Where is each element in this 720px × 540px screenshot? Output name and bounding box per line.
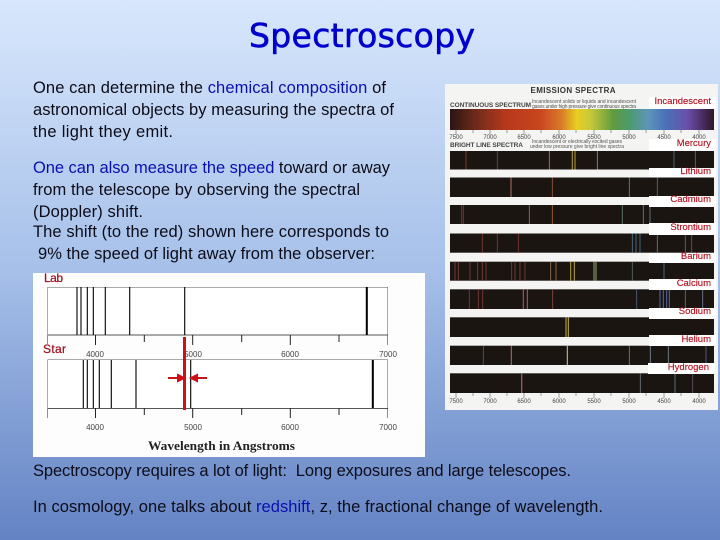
arrow: shift from right bbox=[191, 375, 207, 381]
element labels bbox=[648, 96, 716, 374]
text block: speed and doppler shift: 9% the speed of light away from the observer: bbox=[38, 245, 375, 263]
continuous spectrum heading: Incandescent solids or liquids and incandescent bbox=[532, 99, 637, 105]
star axis labels: 4000 bbox=[86, 423, 104, 432]
bottom wavelength scale: 5000 bbox=[622, 399, 636, 405]
element labels: Cadmium bbox=[670, 194, 711, 205]
star axis labels bbox=[86, 423, 397, 432]
spectrum: barium bbox=[450, 262, 714, 281]
image heading: EMISSION SPECTRA bbox=[530, 86, 616, 95]
spectrum: helium bbox=[450, 346, 714, 365]
bottom wavelength scale: 7000 bbox=[483, 399, 497, 405]
panel: lab and star spectra chart bbox=[33, 271, 425, 457]
spectrum: calcium bbox=[450, 289, 714, 309]
bottom wavelength scale: 5500 bbox=[587, 399, 601, 405]
top wavelength scale: 7000 bbox=[483, 135, 497, 141]
top wavelength scale: 7500 bbox=[449, 135, 463, 141]
spectrum: lithium bbox=[450, 178, 714, 197]
top wavelength scale: 5500 bbox=[587, 135, 601, 141]
text block: speed and doppler shift: One can also measure the speed toward or away bbox=[33, 159, 391, 177]
text block: chemical composition bbox=[33, 79, 394, 141]
element labels: Hydrogen bbox=[668, 362, 709, 373]
bottom wavelength scale: 6000 bbox=[552, 399, 566, 405]
lab axis labels: 7000 bbox=[379, 350, 397, 359]
element labels: Incandescent bbox=[654, 96, 711, 107]
bright line heading: Incandescent or electrically excited gases bbox=[532, 139, 622, 145]
bottom wavelength scale: 4000 bbox=[692, 399, 706, 405]
star axis labels: 6000 bbox=[281, 423, 299, 432]
panel: emission spectra image bbox=[445, 84, 718, 410]
spectrum: mercury bbox=[450, 151, 714, 170]
title: Spectroscopy bbox=[249, 16, 475, 55]
lab axis labels: 4000 bbox=[86, 350, 104, 359]
star axis labels: 5000 bbox=[184, 423, 202, 432]
text block: speed and doppler shift: The shift (to the red) shown here corresponds to bbox=[33, 223, 389, 241]
bright line heading bbox=[450, 139, 624, 150]
element labels: Barium bbox=[681, 251, 711, 262]
spectrum: sodium bbox=[450, 317, 714, 337]
text block: redshift: In cosmology, one talks about redshift, z, the fractional change of wavelength. bbox=[33, 498, 603, 516]
bottom wavelength scale: 4500 bbox=[657, 399, 671, 405]
red reference line bbox=[183, 337, 186, 410]
top wavelength scale: 6500 bbox=[517, 135, 531, 141]
element labels: Calcium bbox=[677, 278, 711, 289]
spectrum: strontium bbox=[450, 234, 714, 253]
element labels: Strontium bbox=[670, 222, 711, 233]
continuous spectrum band bbox=[450, 109, 714, 130]
star spectrum bbox=[48, 360, 388, 418]
continuous spectrum heading bbox=[450, 99, 637, 110]
text block: chemical composition: the light they emit. bbox=[33, 123, 173, 141]
top wavelength scale bbox=[449, 130, 706, 141]
bottom wavelength scale: 6500 bbox=[517, 399, 531, 405]
top wavelength scale: 6000 bbox=[552, 135, 566, 141]
top wavelength scale: 5000 bbox=[622, 135, 636, 141]
text block: speed and doppler shift: (Doppler) shift. bbox=[33, 203, 143, 221]
bright line heading: BRIGHT LINE SPECTRA bbox=[450, 142, 523, 149]
axis title: Wavelength in Angstroms bbox=[148, 438, 295, 453]
lab axis labels: 5000 bbox=[184, 350, 202, 359]
star axis labels: 7000 bbox=[379, 423, 397, 432]
lab axis labels: 6000 bbox=[281, 350, 299, 359]
top wavelength scale: 4500 bbox=[657, 135, 671, 141]
text block: speed and doppler shift: from the telescope by observing the spectral bbox=[33, 181, 360, 199]
element labels: Helium bbox=[681, 334, 711, 345]
text block: speed and doppler shift bbox=[33, 159, 391, 263]
arrow: shift from left bbox=[168, 375, 184, 381]
text block: chemical composition: One can determine the chemical composition of bbox=[33, 79, 386, 97]
bright line heading: under low pressure give bright line spectra bbox=[530, 144, 624, 150]
lab axis labels bbox=[86, 350, 397, 359]
lab spectrum bbox=[48, 287, 388, 345]
bottom wavelength scale: 7500 bbox=[449, 399, 463, 405]
continuous spectrum heading: gases under high pressure give continuous spectra bbox=[532, 104, 636, 110]
spectrum: hydrogen bbox=[450, 373, 714, 393]
spectrum: cadmium bbox=[450, 205, 714, 224]
bottom wavelength scale bbox=[449, 393, 706, 405]
label: lab: Lab bbox=[44, 271, 63, 285]
element labels: Sodium bbox=[679, 306, 711, 317]
text block: chemical composition: astronomical objects by measuring the spectra of bbox=[33, 101, 394, 119]
element labels: Lithium bbox=[680, 166, 711, 177]
top wavelength scale: 4000 bbox=[692, 135, 706, 141]
continuous spectrum heading: CONTINUOUS SPECTRUM bbox=[450, 102, 531, 109]
label: star: Star bbox=[43, 342, 66, 356]
text block: light requirements: Spectroscopy requires a lot of light: Long exposures and large telescopes. bbox=[33, 462, 571, 480]
element labels: Mercury bbox=[677, 138, 711, 149]
